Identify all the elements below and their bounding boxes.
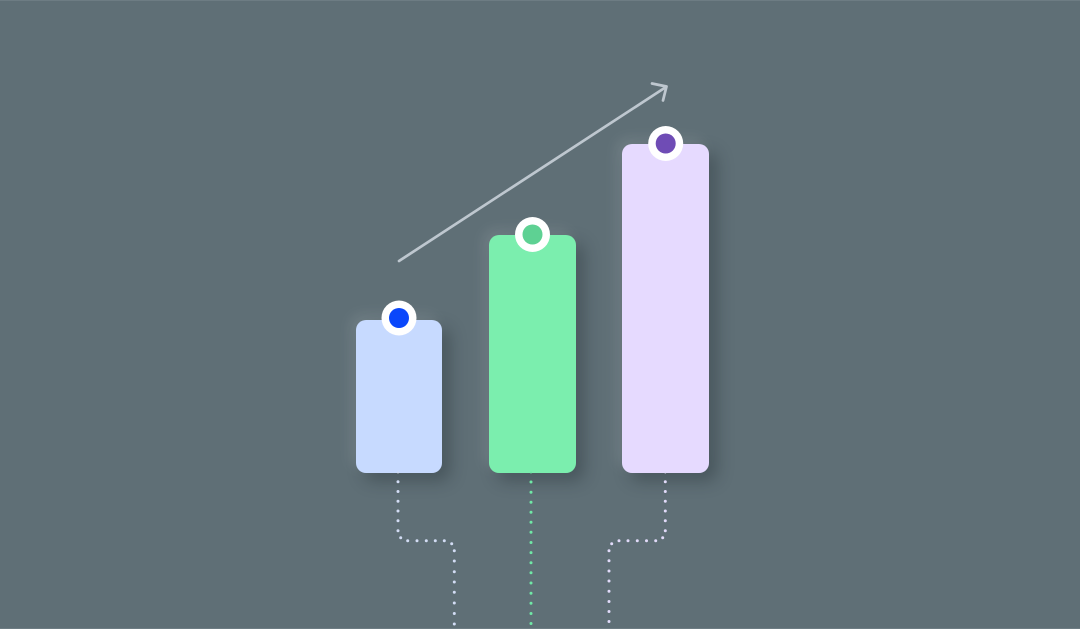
marker: green dot [515,217,550,252]
bar: blue short [356,320,442,473]
bar: green medium [489,235,576,473]
marker: blue dot [382,300,416,336]
marker: purple dot [648,126,683,161]
dotted line: from green bar [530,472,532,625]
dotted line: from blue bar [396,472,456,626]
bar: purple tall [622,144,709,473]
arrow: upward growth trend [399,84,666,261]
dotted line: from purple bar [608,472,667,623]
